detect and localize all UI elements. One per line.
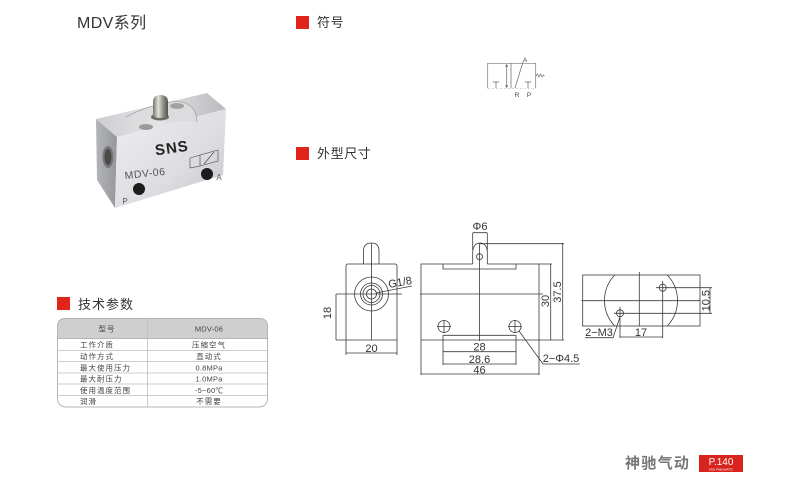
drawing: top view: 10.5 (700, 290, 712, 311)
product photo: MDV-06 valve: SNS (154, 138, 190, 159)
heading: outline dimensions: 外型尺寸 (317, 146, 371, 161)
pneumatic symbol: 3-way valve: A (523, 57, 528, 64)
drawing: top view: 17 (635, 327, 647, 339)
table: technical parameters: 直动式 (196, 351, 222, 361)
drawing: side view: 37.5 (552, 281, 564, 303)
table: technical parameters: 工作介质 (80, 340, 114, 350)
table: technical parameters: 动作方式 (80, 351, 114, 361)
drawing: side view: 28 (473, 342, 486, 354)
table: technical parameters: 不需要 (196, 397, 222, 406)
drawing: top view (582, 272, 712, 339)
pneumatic symbol: 3-way valve: R (515, 92, 520, 99)
drawing: side view: Φ6 (473, 221, 487, 233)
table: technical parameters: 润滑 (80, 396, 97, 406)
table: technical parameters: MDV-06 (195, 324, 223, 334)
icon: red square parameters heading (57, 297, 70, 310)
drawing: side view: 28.6 (469, 354, 490, 366)
table: technical parameters: 1.0MPa (195, 374, 223, 384)
table: technical parameters: 最大使用压力 (80, 362, 131, 372)
table: technical parameters: 使用温度范围 (80, 385, 131, 395)
drawing: side view: 46 (473, 364, 486, 376)
product photo: MDV-06 valve: MDV-06 (124, 166, 166, 182)
icon: red square symbol heading (296, 16, 309, 29)
heading: technical parameters: 技术参数 (78, 297, 134, 312)
product photo: MDV-06 valve: A (216, 173, 222, 182)
title: MDV系列 (77, 14, 147, 32)
table: technical parameters (58, 318, 268, 407)
table: technical parameters: 最大耐压力 (80, 374, 122, 384)
product photo: MDV-06 valve (96, 93, 226, 208)
pneumatic symbol: 3-way valve: P (527, 92, 531, 99)
icon: red square dimensions heading (296, 147, 309, 160)
drawing: side view: 2−Φ4.5 (543, 353, 579, 365)
footer: page badge (699, 455, 743, 472)
table: technical parameters: 0.8MPa (195, 364, 223, 372)
heading: symbol: 符号 (317, 15, 344, 30)
footer: page badge: P.140 (709, 457, 734, 468)
table: technical parameters: -5~60℃ (195, 386, 223, 395)
drawing: top view: 2−M3 (585, 327, 613, 339)
product photo: MDV-06 valve: P (122, 197, 128, 206)
drawing: side view (420, 221, 580, 376)
drawing: front view (322, 243, 413, 355)
footer: page badge: SNS PNEUMATIC (709, 468, 734, 472)
drawing: front view: G1/8 (387, 275, 413, 291)
drawing: front view: 20 (365, 343, 378, 355)
table: technical parameters: 型号 (98, 324, 116, 334)
drawing: front view: 18 (322, 307, 334, 319)
drawing: side view: 30 (540, 295, 552, 307)
table: technical parameters: 压缩空气 (192, 340, 226, 350)
footer: brand name: 神驰气动 (625, 454, 690, 472)
pneumatic symbol: 3-way valve (488, 57, 544, 99)
